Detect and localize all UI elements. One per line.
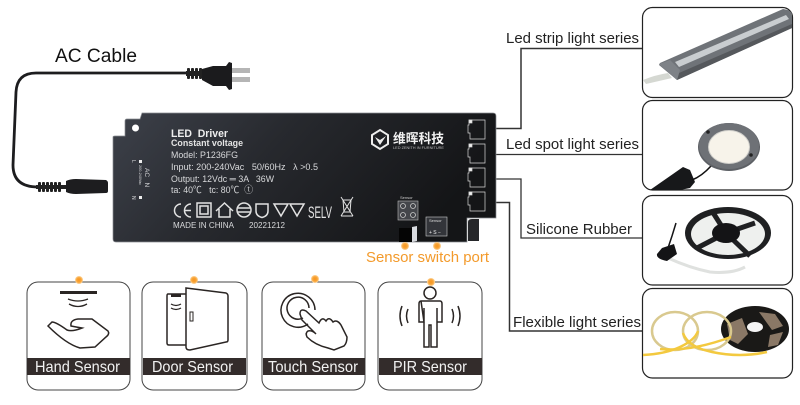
line labels: Flexible light series (513, 315, 641, 331)
panel: LED spot light (642, 100, 792, 190)
panel: silicone rubber (642, 196, 792, 285)
sensor ports: Sensor (400, 195, 413, 200)
AC cable (13, 62, 250, 194)
title: AC Cable label: AC Cable (55, 46, 137, 67)
output ports (468, 120, 485, 211)
certification marks (175, 197, 353, 218)
driver body (113, 113, 496, 242)
sensor card: hand: Hand Sensor (35, 359, 121, 376)
sensor card: door: Door Sensor (152, 359, 234, 376)
sensor card: PIR: PIR Sensor (393, 359, 468, 376)
line labels: Led strip light series (506, 31, 639, 47)
driver label text: Output: 12Vdc ═ 3A 36W (171, 174, 274, 185)
sensor port label: Sensor switch port (366, 249, 490, 266)
sensor ports: + S − (429, 230, 441, 236)
driver label text: Constant voltage (171, 138, 243, 149)
driver label text: Input: 200-240Vac 50/60Hz λ >0.5 (171, 162, 318, 173)
driver label text: 20221212 (249, 221, 286, 230)
sensor card: door (142, 276, 247, 390)
driver label text: MADE IN CHINA (173, 221, 235, 230)
driver label text: Model: P1236FG (171, 150, 238, 161)
logo: 维晖科技 (393, 131, 444, 146)
panel: flexible light (642, 288, 792, 378)
line labels: Led spot light series (506, 137, 639, 153)
driver label text: AC N (143, 168, 150, 187)
line labels (506, 31, 641, 331)
sensor card: hand (27, 276, 130, 390)
line labels: Silicone Rubber (526, 222, 632, 238)
driver label text: L (130, 160, 136, 163)
connector lines (495, 48, 642, 331)
sensor card: touch (262, 275, 365, 390)
driver body: SELV (308, 203, 332, 222)
driver label text: N (130, 196, 136, 200)
logo (372, 130, 444, 150)
sensor card: touch: Touch Sensor (268, 359, 359, 376)
driver label text (130, 128, 318, 230)
panel: LED strip light (642, 8, 792, 98)
logo: LED ZENITH IN FURNITURE (393, 146, 444, 150)
driver label text: LED Driver (171, 128, 229, 140)
sensor card: PIR (378, 278, 482, 390)
sensor ports (398, 195, 447, 242)
sensor ports: Sensor (429, 218, 442, 223)
driver label text: 200-240Vac (138, 165, 142, 185)
driver label text: ta: 40℃ tc: 80℃ ⓣ (171, 185, 253, 196)
